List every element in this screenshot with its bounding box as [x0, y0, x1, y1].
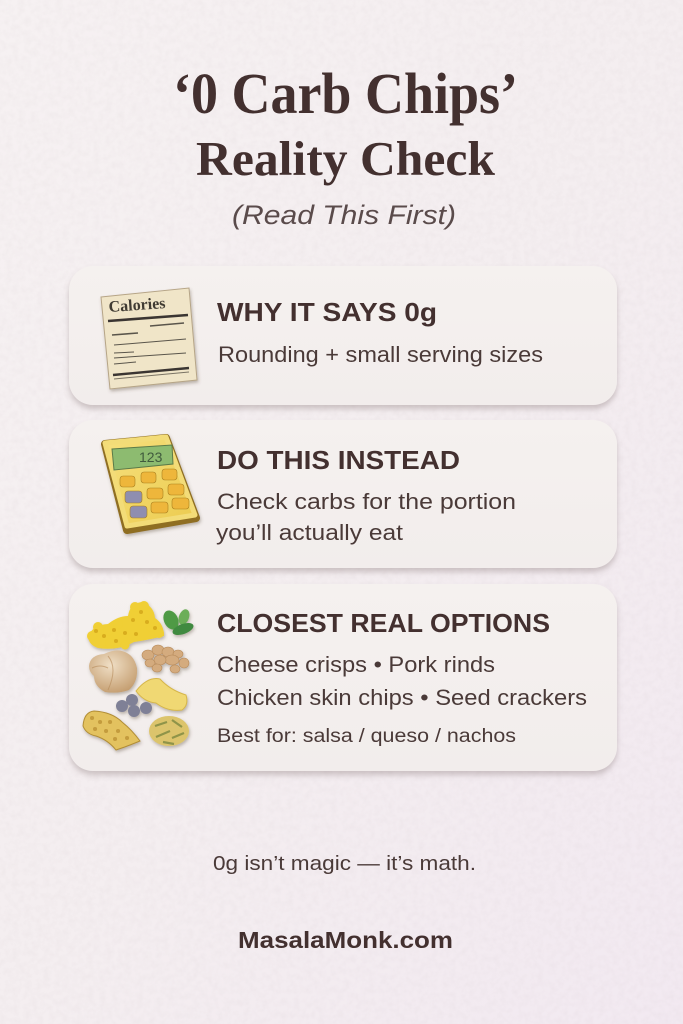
panel: closest real options: [69, 584, 617, 771]
tan seeds cluster: [142, 645, 189, 673]
title: ‘0 Carb Chips’: [173, 61, 518, 126]
seed cracker: [83, 711, 140, 750]
icon: calculator: 123: [139, 449, 163, 465]
yellow cheese crisps: [87, 601, 164, 650]
green leaves: [160, 608, 195, 637]
body: options list: Chicken skin chips • Seed crackers: [217, 685, 587, 710]
heading: closest real options: CLOSEST REAL OPTIONS: [217, 608, 550, 638]
footer tagline: 0g isn’t magic — it’s math.: [213, 853, 476, 875]
pork rinds: [89, 650, 137, 693]
blue seeds: [116, 694, 152, 717]
chicken skin chip: [136, 678, 187, 710]
body: options list: Cheese crisps • Pork rinds: [217, 652, 495, 677]
footer brand: MasalaMonk.com: [238, 927, 453, 953]
body: check carbs: Check carbs for the portion: [217, 489, 516, 514]
body: check carbs: [216, 489, 516, 545]
body: best for: Best for: salsa / queso / nachos: [217, 726, 516, 747]
heading: why it says 0g: WHY IT SAYS 0g: [217, 297, 437, 327]
icon: nutrition label: Calories: [108, 295, 166, 316]
panel: do this instead: [69, 420, 617, 568]
subtitle: (Read This First): [232, 200, 456, 230]
title: [173, 61, 518, 186]
body: check carbs: you’ll actually eat: [216, 520, 403, 545]
icon: nutrition label: [101, 288, 197, 389]
icon: calculator: [105, 437, 196, 530]
title: Reality Check: [196, 131, 496, 186]
icon: low-carb snacks: [83, 601, 195, 750]
body: options list: [217, 652, 587, 710]
body: rounding: Rounding + small serving sizes: [218, 342, 543, 367]
seed pile: [149, 716, 189, 746]
heading: do this instead: DO THIS INSTEAD: [217, 445, 460, 475]
panel: why it says 0g: [69, 266, 617, 405]
